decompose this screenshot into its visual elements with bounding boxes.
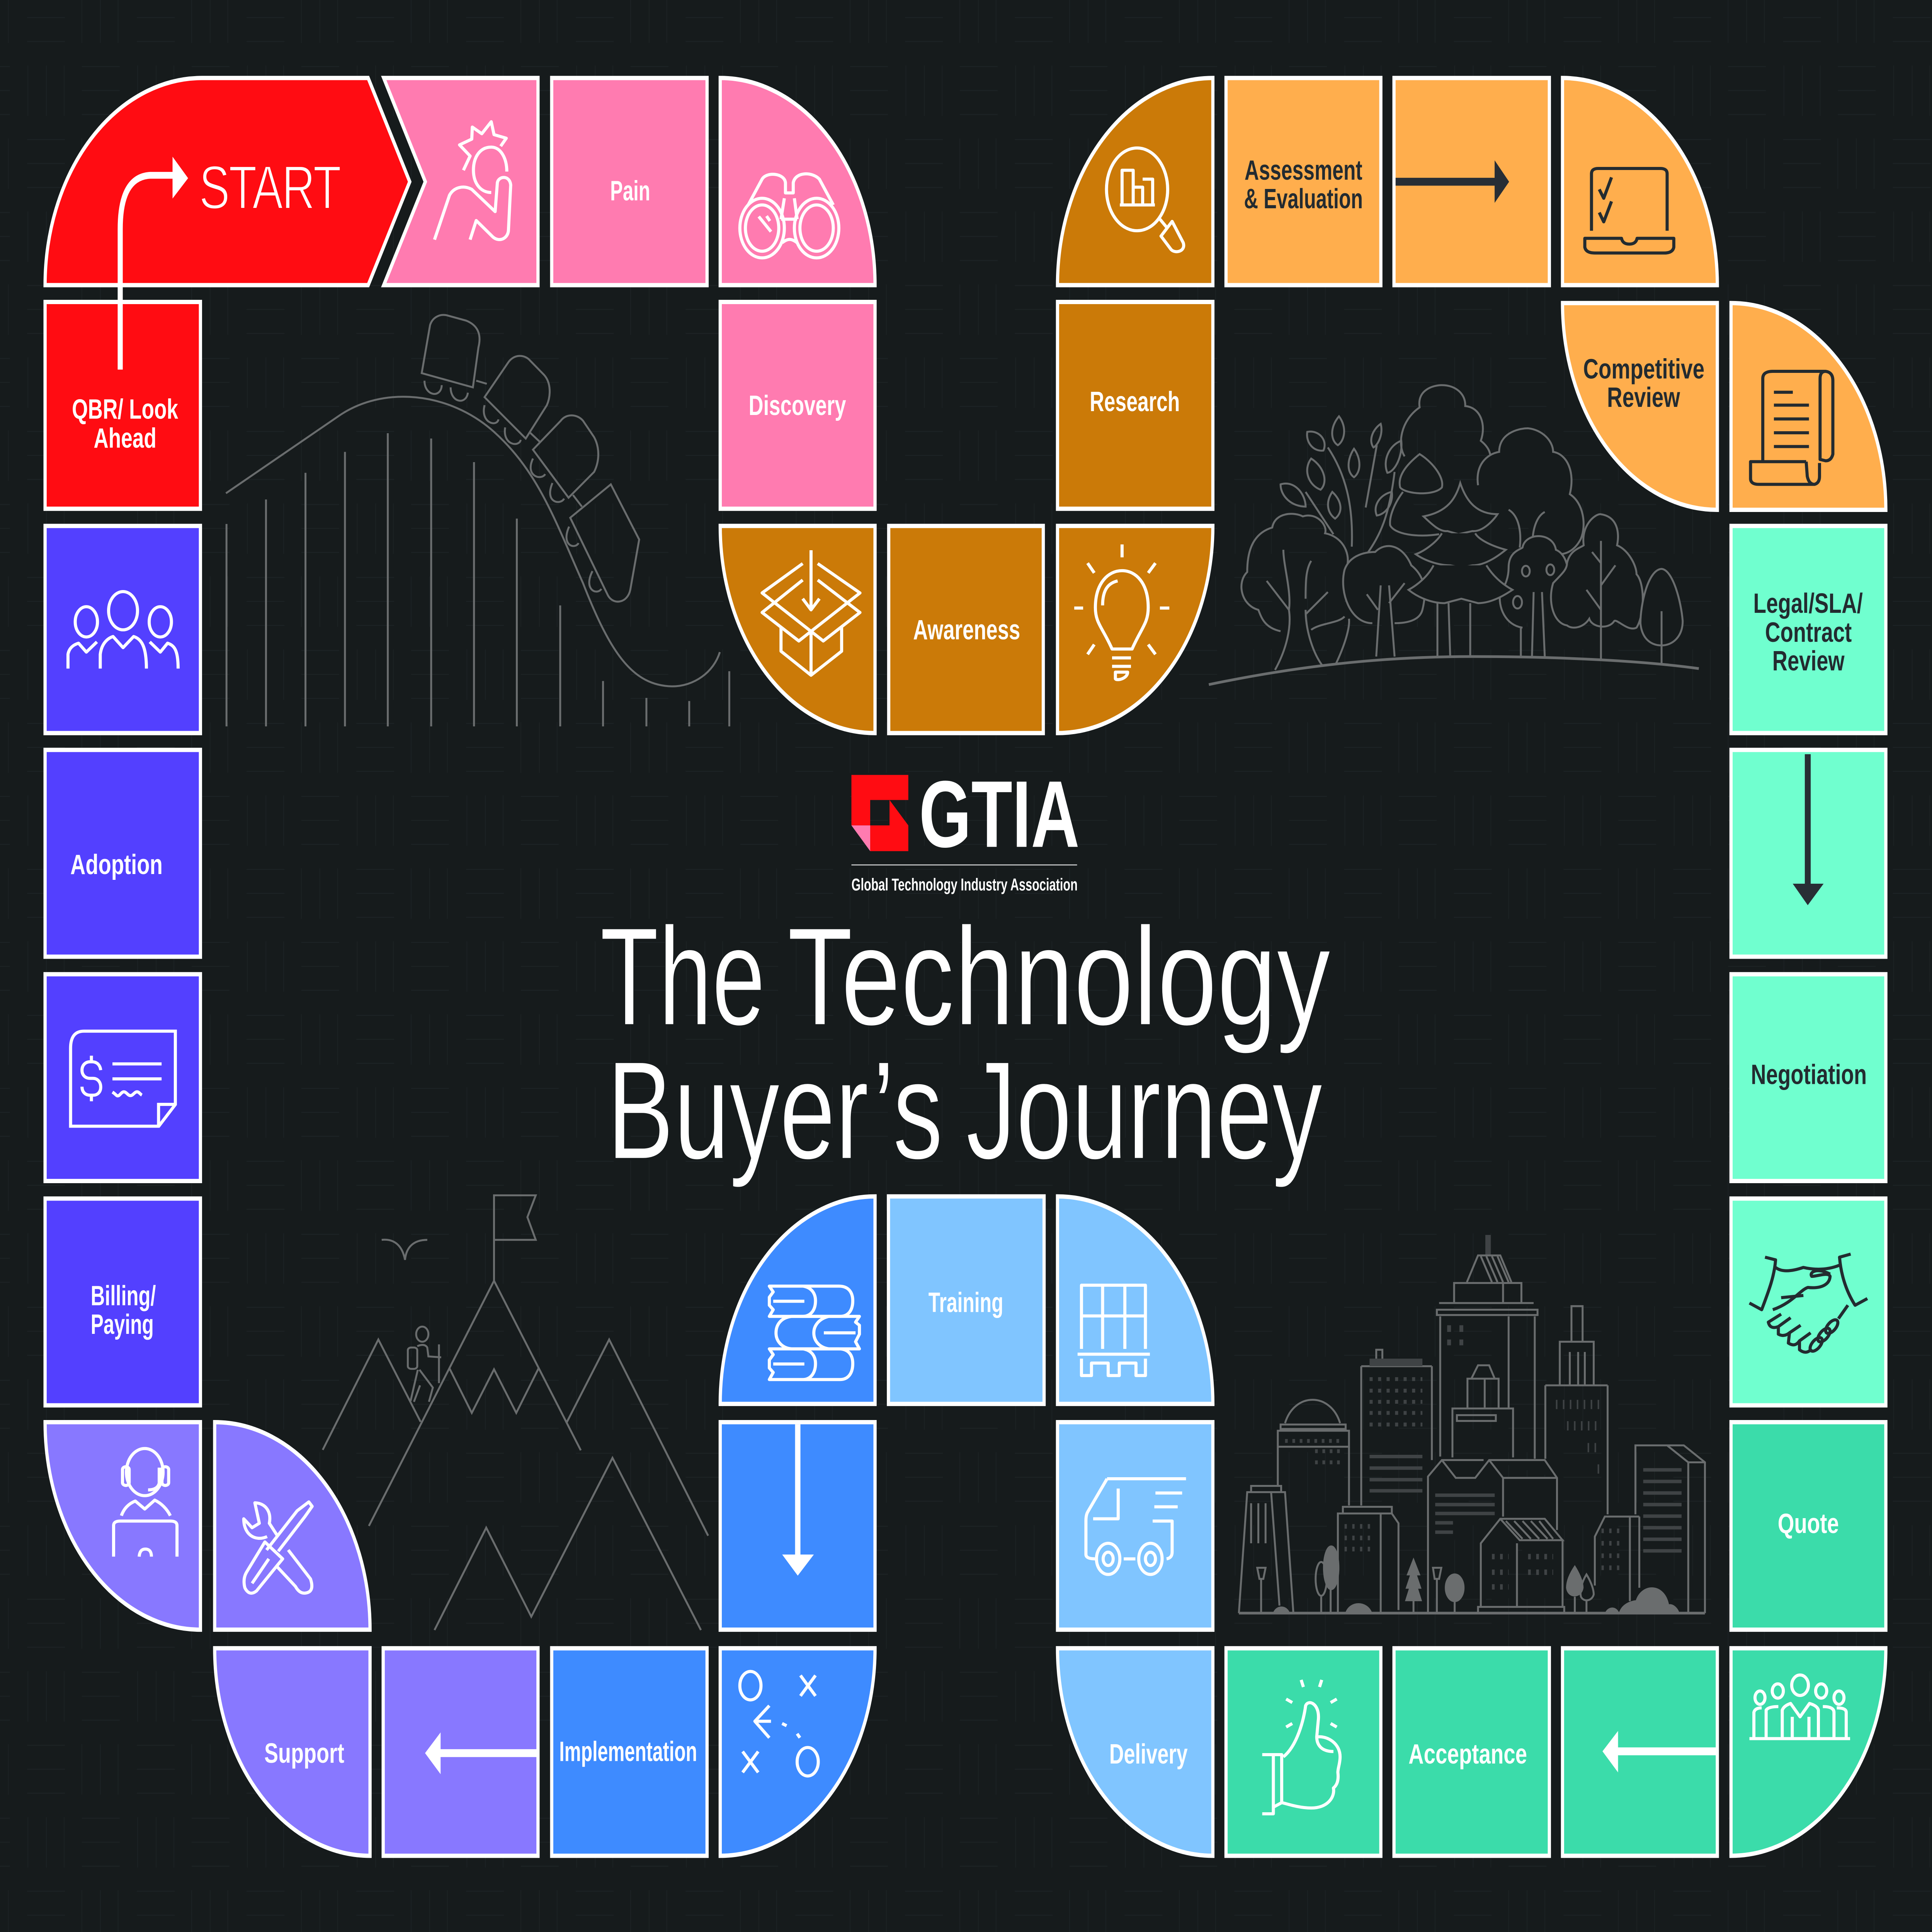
tile: acceptance: [1394, 1648, 1549, 1856]
tile: thumbs up: [1226, 1648, 1381, 1856]
illustration: mountains and hiker: [323, 1196, 708, 1630]
tile: billing / paying: Paying: [91, 1308, 154, 1340]
tile: legal / SLA / contract review: Review: [1772, 645, 1845, 677]
tile: pain icon: [384, 78, 538, 285]
tile: start: [45, 78, 410, 285]
tile: adoption: Adoption: [70, 849, 163, 880]
tile: assessment and evaluation: Assessment: [1245, 154, 1362, 186]
tile: discovery: [720, 302, 875, 509]
tile: research: [1058, 302, 1213, 509]
tile: pain: Pain: [610, 175, 650, 206]
title: The: [600, 898, 765, 1054]
tile: competitive review: [1563, 303, 1717, 510]
tile: books: [720, 1196, 875, 1404]
logo wordmark: GTIA: [919, 761, 1080, 867]
tile: invoice: [45, 974, 201, 1181]
tile: implementation: Implementation: [559, 1736, 697, 1767]
tile: assessment and evaluation: [1226, 78, 1381, 285]
tile: acceptance: Acceptance: [1408, 1738, 1527, 1770]
tile: pallet: [1058, 1196, 1213, 1404]
tile: tools: [215, 1422, 370, 1630]
tile: competitive review: Competitive: [1583, 353, 1704, 384]
tile: start: START: [199, 153, 341, 222]
tile: legal / SLA / contract review: Legal/SLA/: [1753, 587, 1863, 619]
tile: negotiation: Negotiation: [1751, 1059, 1867, 1090]
illustration: city skyline: [1239, 1235, 1705, 1613]
tile: competitive review: Review: [1607, 381, 1680, 413]
tile: headset agent: [45, 1422, 201, 1630]
tile: billing / paying: Billing/: [91, 1280, 156, 1311]
tile: QBR / look ahead: QBR/ Look: [72, 393, 179, 425]
logo: GTIA: [851, 761, 1080, 895]
tile: delivery: Delivery: [1109, 1738, 1188, 1770]
tile: assessment and evaluation: & Evaluation: [1244, 183, 1363, 214]
tile: left arrow purple: [383, 1648, 538, 1856]
tile: implementation: [552, 1648, 707, 1856]
tile: down arrow blue: [720, 1422, 875, 1630]
tile: support: [215, 1648, 370, 1856]
illustration: roller coaster: [226, 315, 729, 726]
tile: light bulb: [1058, 526, 1213, 733]
tile: discovery: Discovery: [749, 389, 846, 421]
title: Buyer’s: [607, 1032, 943, 1189]
tile: QBR / look ahead: [45, 302, 201, 509]
tile: handshake: [1731, 1199, 1886, 1405]
tile: people: [45, 526, 201, 733]
illustration: forest: [1209, 385, 1699, 685]
logo mark: [851, 775, 908, 851]
tile: QBR / look ahead: Ahead: [94, 422, 156, 454]
title: [600, 898, 1330, 1189]
tile: magnifier: [1058, 78, 1213, 285]
tile: right arrow: [1394, 78, 1549, 285]
title: Journey: [966, 1032, 1322, 1189]
tile: playbook: [720, 1648, 875, 1856]
tile: team: [1731, 1648, 1886, 1856]
logo tagline: Global Technology Industry Association: [851, 875, 1078, 895]
tile: box icon: [720, 526, 875, 733]
tile: quote: [1731, 1422, 1886, 1630]
tile: delivery truck: [1058, 1422, 1213, 1630]
tile: training: [888, 1196, 1044, 1404]
tile: negotiation: [1731, 974, 1886, 1181]
tile: support: Support: [264, 1737, 344, 1769]
arrow: start arrow: [120, 157, 188, 369]
tile: research: Research: [1090, 386, 1180, 417]
tile: training: Training: [929, 1287, 1003, 1318]
tile: pain: [552, 78, 707, 285]
tile: awareness: [889, 526, 1043, 733]
title: Technology: [787, 898, 1330, 1055]
tile: scroll: [1731, 303, 1886, 510]
tile: legal / SLA / contract review: Contract: [1765, 616, 1852, 648]
tile: legal / SLA / contract review: [1731, 526, 1886, 733]
tile: binoculars: [720, 78, 875, 285]
tile: adoption: [45, 750, 201, 957]
tile: laptop checklist: [1563, 78, 1717, 285]
tile: left arrow green: [1563, 1648, 1717, 1856]
tile: delivery: [1058, 1648, 1213, 1856]
tile: billing / paying: [45, 1199, 201, 1405]
tile: down arrow: [1731, 750, 1886, 957]
tile: awareness: Awareness: [913, 614, 1020, 645]
tile: quote: Quote: [1778, 1508, 1839, 1539]
